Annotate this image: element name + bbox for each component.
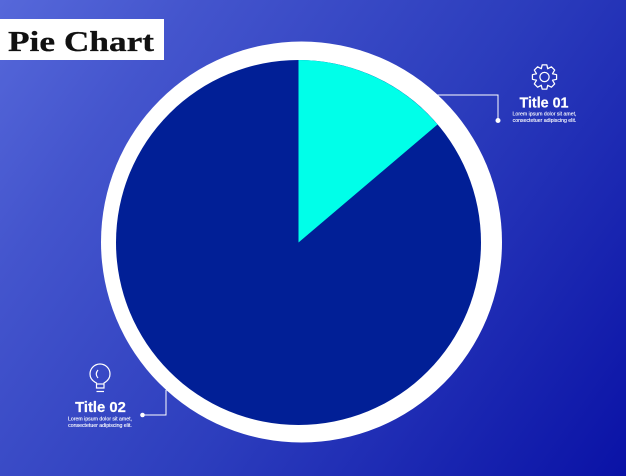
title: Pie Chart [8,26,154,58]
slice: title 01 [298,60,438,242]
label: title 01 [512,96,577,124]
connector: title 02 [140,390,166,417]
label: title 01: consectetuer adipiscing elit. [513,118,576,124]
label: title 02 [68,400,132,429]
connector: title 01 [436,95,500,123]
title [0,19,164,60]
icon: gear [532,65,557,89]
label: title 02: consectetuer adipiscing elit. [68,423,132,429]
label: title 02: Lorem ipsum dolor sit amet, [68,416,132,422]
label: title 02: Title 02 [75,400,126,416]
label: title 01: Title 01 [519,96,569,112]
label: title 01: Lorem ipsum dolor sit amet, [512,112,577,118]
pie chart [101,42,502,442]
icon: light bulb [90,364,110,392]
